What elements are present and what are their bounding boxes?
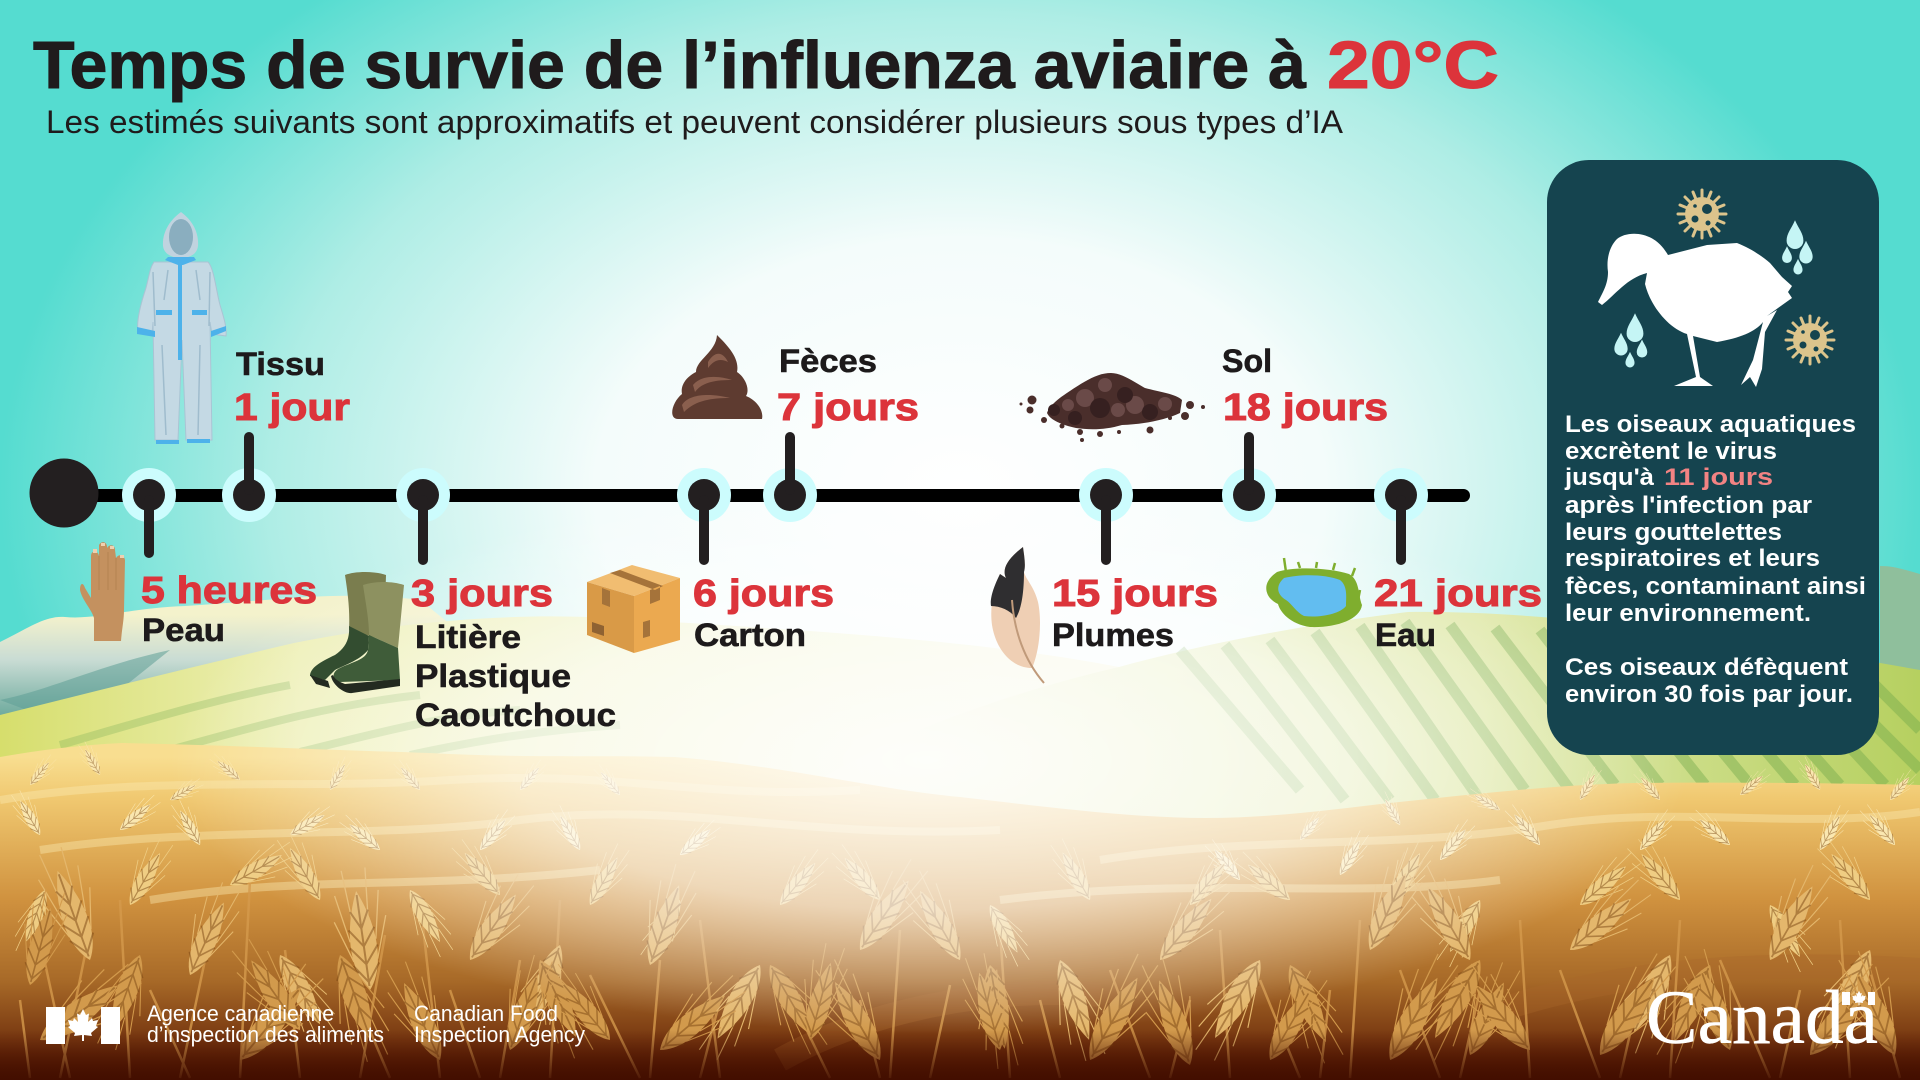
marker: 15 jours bbox=[1079, 468, 1133, 565]
text: agency name English: Inspection Agency bbox=[414, 1022, 585, 1047]
text: Carton: Carton bbox=[694, 617, 806, 653]
text: Tissu: Tissu bbox=[236, 346, 325, 382]
text: 7 jours: 7 jours bbox=[777, 387, 919, 429]
marker: 5 heures bbox=[122, 468, 176, 558]
marker: 1 jour bbox=[222, 432, 276, 522]
text: panel paragraph: après l'infection par bbox=[1565, 492, 1812, 519]
text: agency name French: d’inspection des aliments bbox=[147, 1022, 384, 1047]
logo: Canada wordmark: Canada bbox=[1646, 976, 1878, 1060]
icon: pond bbox=[1266, 558, 1362, 627]
marker: 7 jours bbox=[763, 432, 817, 522]
timeline bbox=[30, 432, 1470, 565]
marker: 21 jours bbox=[1374, 468, 1428, 565]
panel: waterfowl bbox=[1547, 160, 1879, 755]
icon: cardboard box bbox=[587, 565, 680, 653]
icon: duck bbox=[1598, 234, 1792, 387]
marker: 3 jours bbox=[396, 468, 450, 565]
text: 3 jours: 3 jours bbox=[411, 573, 553, 615]
icon: soil pile bbox=[1020, 373, 1205, 442]
text: Fèces: Fèces bbox=[779, 343, 877, 379]
text: agency name English: Canadian Food bbox=[414, 1001, 558, 1026]
text: panel paragraph: jusqu'à bbox=[1564, 464, 1655, 491]
text: Litière: Litière bbox=[415, 619, 521, 655]
text: panel paragraph: environ 30 fois par jour. bbox=[1565, 681, 1853, 708]
text: panel paragraph: fèces, contaminant ainsi bbox=[1565, 573, 1866, 600]
logo: Canadian flag signature bbox=[46, 1007, 120, 1044]
icon: virus right bbox=[1786, 316, 1834, 364]
icon: feather bbox=[991, 547, 1044, 683]
text: agency name French bbox=[147, 1001, 384, 1047]
text: Eau: Eau bbox=[1375, 617, 1436, 653]
text: Sol: Sol bbox=[1222, 343, 1272, 379]
text: panel paragraph: Ces oiseaux défèquent bbox=[1565, 654, 1848, 681]
text: Peau: Peau bbox=[142, 612, 225, 648]
text: 15 jours: 15 jours bbox=[1052, 573, 1218, 615]
icon: protective suit bbox=[137, 212, 226, 444]
background: wheat field bbox=[0, 739, 1920, 1080]
text: panel paragraph bbox=[1564, 411, 1866, 708]
subtitle: Les estimés suivants sont approximatifs et peuvent considérer plusieurs sous types d’IA bbox=[46, 104, 1344, 140]
icon: rubber boots bbox=[310, 572, 404, 693]
text: 1 jour: 1 jour bbox=[234, 387, 350, 429]
text: panel paragraph: leur environnement. bbox=[1565, 600, 1811, 627]
text: panel paragraph: excrètent le virus bbox=[1565, 438, 1777, 465]
icon: feces bbox=[672, 335, 762, 419]
icon: hand bbox=[80, 542, 125, 641]
wheat stems bbox=[20, 880, 1900, 1078]
wheat ears bbox=[7, 739, 1920, 1076]
background: rolling hills bbox=[0, 566, 1920, 820]
text: 21 jours: 21 jours bbox=[1374, 573, 1542, 615]
text: 6 jours: 6 jours bbox=[693, 573, 834, 615]
text: 18 jours: 18 jours bbox=[1223, 387, 1388, 429]
background: dark lower edge bbox=[0, 1030, 1920, 1080]
text: Caoutchouc: Caoutchouc bbox=[415, 697, 616, 733]
text: 5 heures: 5 heures bbox=[141, 570, 317, 612]
text: agency name French: Agence canadienne bbox=[147, 1001, 334, 1026]
icon: virus top bbox=[1678, 190, 1726, 238]
marker: 18 jours bbox=[1222, 432, 1276, 522]
text: panel paragraph: respiratoires et leurs bbox=[1565, 545, 1820, 572]
marker: 6 jours bbox=[677, 468, 731, 565]
text: Plastique: Plastique bbox=[415, 658, 571, 694]
text: Plumes: Plumes bbox=[1052, 617, 1174, 653]
icon: droplets right bbox=[1782, 220, 1813, 274]
background: central light glow bbox=[0, 480, 1920, 1040]
title: 20°C bbox=[1327, 28, 1499, 103]
text: panel paragraph: Les oiseaux aquatiques bbox=[1565, 411, 1856, 438]
text: panel paragraph: 11 jours bbox=[1664, 464, 1773, 491]
text: agency name English bbox=[414, 1001, 585, 1047]
title: Temps de survie de l’influenza aviaire à bbox=[33, 28, 1307, 103]
text: panel paragraph: leurs gouttelettes bbox=[1565, 519, 1782, 546]
icon: droplets left bbox=[1614, 313, 1647, 368]
